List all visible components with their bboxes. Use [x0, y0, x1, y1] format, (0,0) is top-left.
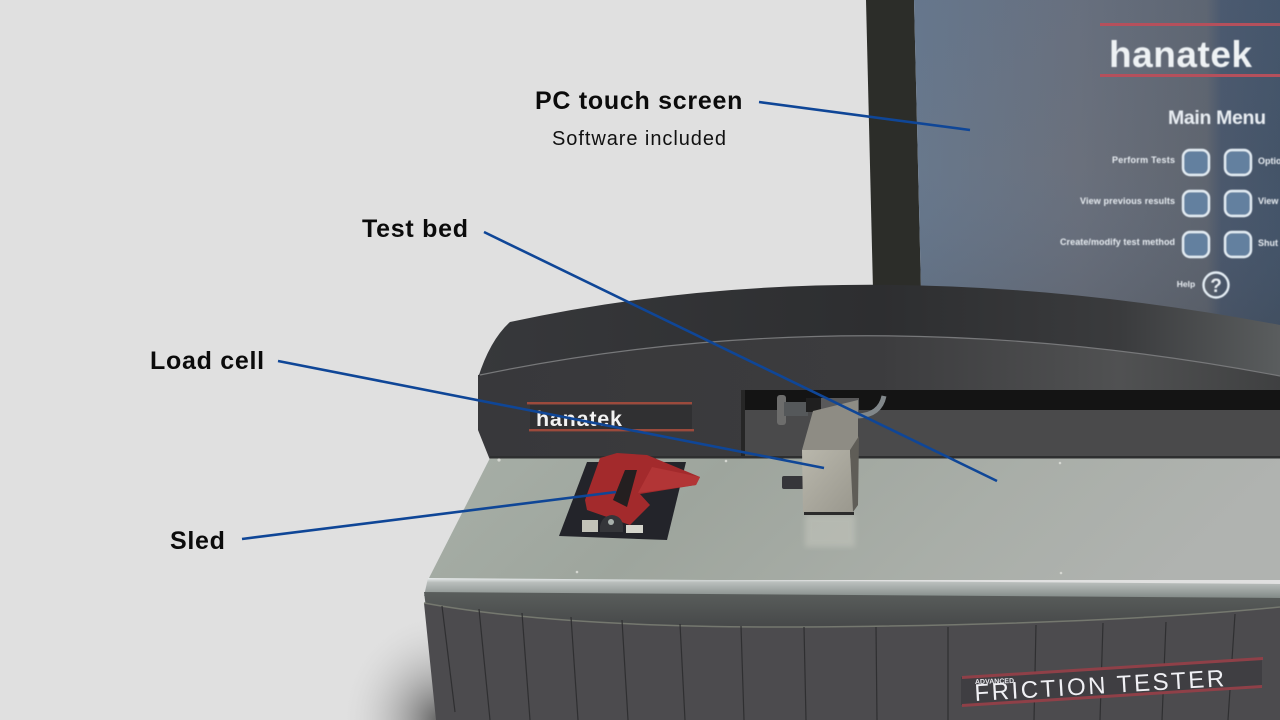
sled clips — [582, 520, 598, 532]
screen main menu: Help — [1177, 279, 1195, 289]
screen logo: hanatek — [1109, 34, 1252, 75]
housing logo — [527, 402, 694, 431]
sled base plate — [559, 462, 686, 540]
load cell bracket — [782, 476, 804, 489]
label: software included: Software included — [552, 128, 726, 150]
label: PC touch screen: PC touch screen — [535, 87, 743, 115]
monitor bezel — [866, 0, 921, 290]
machine front panel — [424, 603, 1280, 720]
housing logo: hanatek — [536, 407, 622, 431]
screen main menu: Perform Tests — [1112, 155, 1175, 165]
load cell reflection — [805, 515, 855, 547]
screen main menu: Shut — [1258, 238, 1278, 248]
touch screen — [914, 0, 1280, 330]
bed underside — [424, 592, 1280, 640]
housing top surface — [478, 285, 1280, 380]
machine housing — [478, 285, 1280, 460]
leader line: sled — [242, 492, 616, 539]
leader line: PC touch screen — [759, 102, 970, 130]
red sled — [585, 453, 700, 525]
monitor — [866, 0, 1280, 330]
leader line: test bed — [484, 232, 997, 481]
friction tester badge: FRICTION TESTER — [974, 665, 1225, 707]
housing rear face — [478, 336, 1280, 460]
load cell knob and hook — [777, 395, 884, 425]
bed surface — [428, 458, 1280, 580]
screen logo — [1100, 23, 1280, 77]
label: test bed: Test bed — [362, 215, 469, 243]
friction tester badge: ADVANCED — [975, 678, 1014, 686]
screen main menu: View — [1258, 196, 1279, 206]
bed rivets — [497, 458, 1062, 574]
screen main menu: Create/modify test method — [1060, 237, 1175, 247]
carriage slot — [741, 390, 1280, 458]
screen main menu — [1060, 107, 1280, 298]
leader line: load cell — [278, 361, 824, 468]
panel ribs — [442, 606, 1235, 720]
screen main menu: Main Menu — [1168, 107, 1266, 129]
friction tester badge — [961, 657, 1263, 707]
label: load cell: Load cell — [150, 347, 265, 375]
sled thumb screw — [600, 515, 623, 532]
test bed table — [424, 456, 1280, 720]
label: sled: Sled — [170, 527, 226, 555]
load cell — [777, 395, 884, 515]
screen main menu: View previous results — [1080, 196, 1175, 206]
screen main menu: ? — [1210, 276, 1222, 297]
bed front lip — [424, 578, 1280, 600]
machine shadow — [340, 600, 450, 720]
load cell body — [802, 400, 858, 450]
sled — [559, 453, 700, 540]
